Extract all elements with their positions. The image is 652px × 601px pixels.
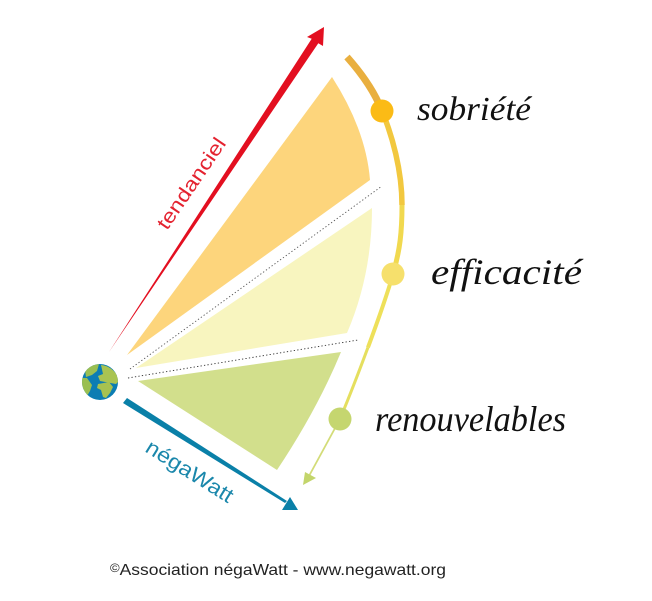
label: négaWatt: négaWatt: [141, 436, 238, 508]
wedge: renewables: [138, 352, 341, 470]
dot: efficiency: [382, 262, 404, 286]
label: tendanciel: tendanciel: [153, 134, 231, 234]
credit line: Association négaWatt - www.negawatt.org: [120, 562, 446, 579]
arrowhead: renewables end: [303, 472, 316, 485]
dot: sobriety: [370, 100, 394, 122]
label: efficacité: efficacité: [431, 252, 584, 292]
credit line: ©: [110, 561, 120, 575]
diagram: négaWatt scenario: [82, 27, 584, 578]
dot: renewables: [328, 408, 352, 430]
wedge: efficiency: [136, 208, 372, 368]
label: renouvelables: renouvelables: [375, 399, 566, 439]
arrow: négaWatt trend (blue): [123, 398, 298, 510]
curved arrow: three steps: [303, 57, 402, 485]
arrow: tendanciel trend (red): [109, 27, 324, 352]
icon: earth globe: [81, 364, 120, 400]
wedge: sobriety: [127, 77, 370, 355]
label: sobriété: sobriété: [417, 91, 533, 128]
